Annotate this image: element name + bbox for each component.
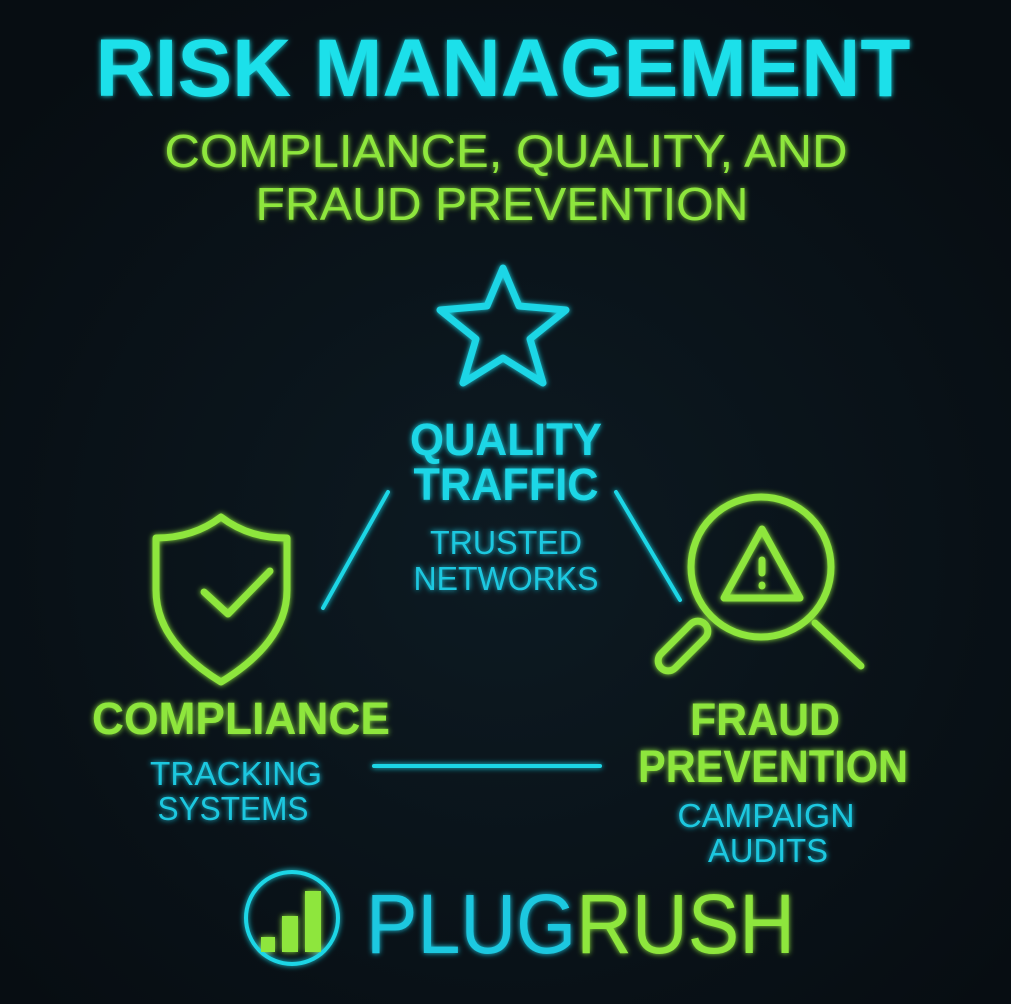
heading: quality traffic: TRAFFIC — [414, 459, 598, 510]
text: campaign audits — [678, 797, 854, 869]
text: tracking systems: TRACKING — [150, 755, 322, 792]
heading: fraud prevention: FRAUD — [690, 694, 840, 745]
heading: quality traffic — [410, 414, 602, 510]
text: tracking systems — [150, 755, 322, 827]
icon: logo circle bars — [246, 872, 338, 964]
logo text: PLUGRUSH — [366, 877, 795, 971]
subtitle: COMPLIANCE, QUALITY, AND — [164, 125, 848, 177]
heading: compliance: COMPLIANCE — [92, 693, 390, 744]
text: trusted networks — [414, 524, 598, 597]
icon: shield — [156, 517, 287, 682]
heading: fraud prevention: PREVENTION — [638, 741, 908, 792]
text: trusted networks: TRUSTED — [430, 524, 582, 561]
text: trusted networks: NETWORKS — [414, 560, 598, 597]
connector lines — [323, 492, 680, 766]
subtitle: FRAUD PREVENTION — [256, 178, 748, 230]
heading: fraud prevention — [638, 694, 908, 792]
icon: star — [440, 268, 566, 383]
text: campaign audits: AUDITS — [708, 832, 828, 869]
title: RISK MANAGEMENT — [96, 23, 910, 114]
text: tracking systems: SYSTEMS — [158, 790, 308, 827]
text: campaign audits: CAMPAIGN — [678, 797, 854, 834]
logo — [246, 872, 795, 971]
subtitle — [164, 125, 848, 230]
heading: quality traffic: QUALITY — [410, 414, 602, 465]
icon: magnifier with warning — [654, 497, 861, 675]
